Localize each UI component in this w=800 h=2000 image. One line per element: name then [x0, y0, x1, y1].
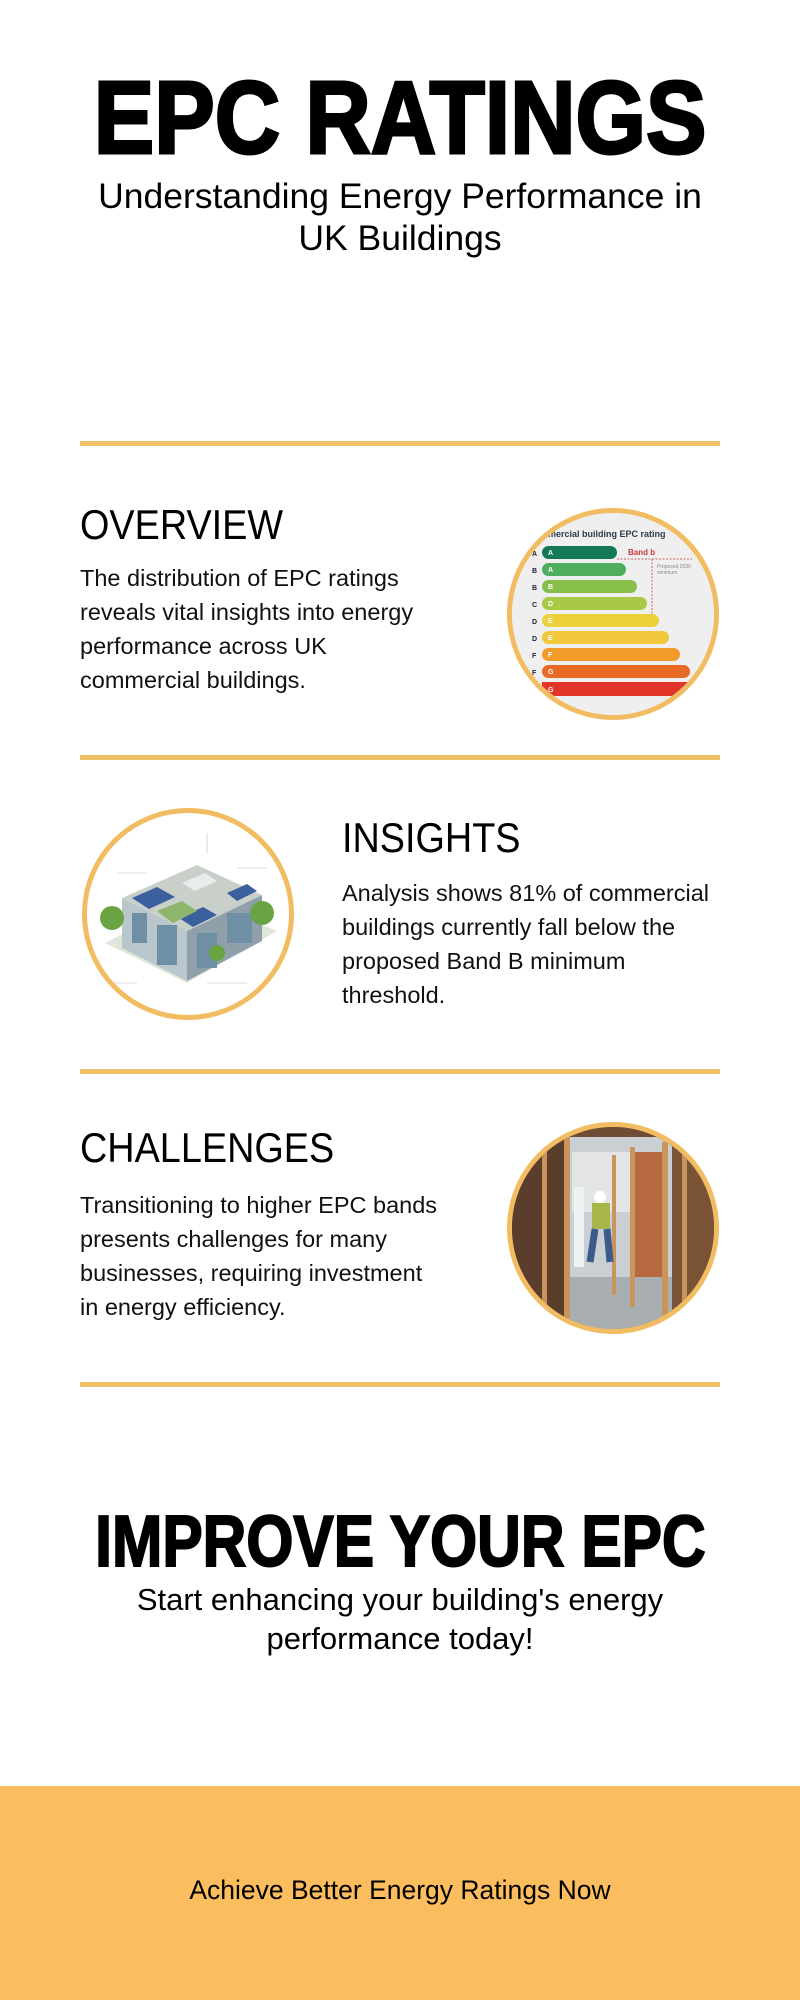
text: insights: buildings currently fall below the: [342, 914, 675, 940]
subtitle: [98, 176, 702, 258]
text: challenges: Transitioning to higher EPC bands: [80, 1192, 437, 1218]
text: call to action: Start enhancing your building's energy: [137, 1582, 663, 1617]
icon: EPC chart image: Proposed 2030: [657, 564, 691, 570]
text: overview: commercial buildings.: [80, 667, 306, 693]
icon: building illustration: [82, 808, 294, 1020]
icon: EPC chart image: F: [532, 653, 537, 660]
icon: EPC chart image: minimum: [657, 570, 677, 576]
text: insights: threshold.: [342, 982, 445, 1008]
icon: EPC chart image: A: [532, 551, 537, 558]
icon: EPC chart image: mmercial building EPC rating: [540, 529, 666, 539]
subtitle: UK Buildings: [298, 218, 502, 258]
icon: EPC chart image: E: [548, 635, 553, 642]
icon: EPC chart image: [507, 508, 719, 720]
text: call to action: performance today!: [266, 1621, 534, 1656]
heading: insights: INSIGHTS: [342, 814, 521, 861]
icon: EPC chart image: B: [532, 568, 537, 575]
footer text: Achieve Better Energy Ratings Now: [189, 1875, 611, 1905]
icon: EPC chart image: D: [548, 601, 553, 608]
icon: EPC chart image: E: [548, 618, 553, 625]
text: overview: The distribution of EPC ratings: [80, 565, 399, 591]
text: call to action: [137, 1582, 663, 1656]
icon: EPC chart image: G: [548, 669, 554, 676]
icon: EPC chart image: B: [548, 584, 553, 591]
text: overview: [80, 565, 413, 693]
text: insights: Analysis shows 81% of commercial: [342, 880, 709, 906]
title: EPC RATINGS: [94, 60, 706, 175]
icon: construction photo: [507, 1122, 719, 1334]
icon: EPC chart image: D: [532, 636, 537, 643]
icon: EPC chart image: Band b: [628, 548, 655, 557]
heading: improve your EPC: IMPROVE YOUR EPC: [95, 1502, 705, 1582]
text: overview: performance across UK: [80, 633, 327, 659]
icon: EPC chart image: G: [548, 687, 554, 694]
text: insights: proposed Band B minimum: [342, 948, 625, 974]
text: insights: [342, 880, 709, 1008]
text: overview: reveals vital insights into energy: [80, 599, 413, 625]
icon: EPC chart image: F: [532, 670, 537, 677]
heading: overview: OVERVIEW: [80, 501, 283, 548]
subtitle: Understanding Energy Performance in: [98, 176, 702, 216]
icon: EPC chart image: A: [548, 567, 553, 574]
heading: challenges: CHALLENGES: [80, 1124, 334, 1171]
text: challenges: presents challenges for many: [80, 1226, 387, 1252]
icon: EPC chart image: D: [532, 619, 537, 626]
text: challenges: [80, 1192, 437, 1320]
text: challenges: businesses, requiring investment: [80, 1260, 422, 1286]
text: challenges: in energy efficiency.: [80, 1294, 286, 1320]
footer banner: [0, 1786, 800, 2000]
icon: EPC chart image: A: [548, 550, 553, 557]
icon: EPC chart image: C: [532, 602, 537, 609]
icon: EPC chart image: F: [548, 652, 553, 659]
icon: EPC chart image: B: [532, 585, 537, 592]
